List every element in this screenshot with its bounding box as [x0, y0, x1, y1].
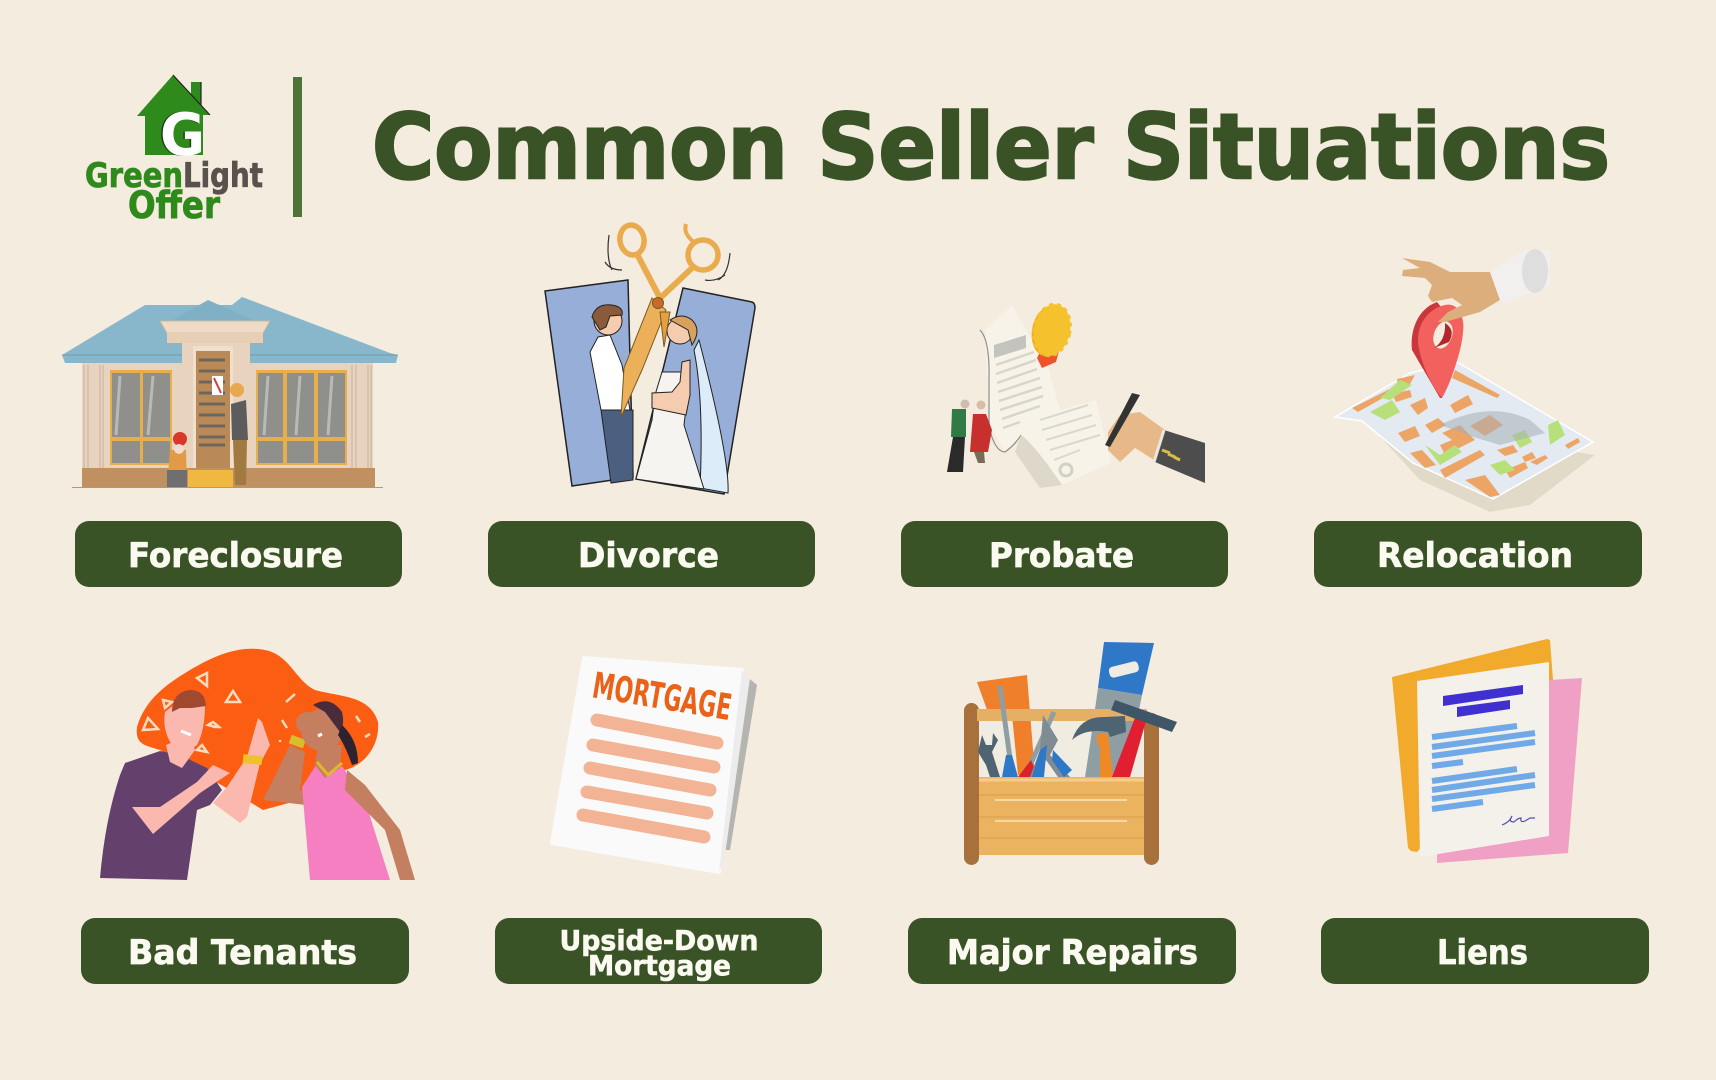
- pill: Major Repairs: [908, 918, 1236, 984]
- logo: GreenLight Offer: [85, 75, 263, 227]
- pill: Divorce: [488, 521, 815, 587]
- illustration: lien documents: [1392, 639, 1582, 863]
- pill: Upside-Down Mortgage: Upside-Down: [560, 924, 758, 957]
- logo: GreenLight Offer: G: [160, 100, 205, 169]
- title: Common Seller Situations: [372, 95, 1610, 200]
- illustration: toolbox: [964, 642, 1177, 865]
- pill: Foreclosure: Foreclosure: [128, 536, 343, 576]
- illustration: foreclosure house: [62, 297, 398, 488]
- pill: Upside-Down Mortgage: [495, 918, 822, 984]
- illustration: probate document: [947, 301, 1205, 488]
- illustration: relocation map and pin: [1335, 249, 1595, 512]
- logo: GreenLight Offer: Light: [183, 156, 263, 196]
- pill: Relocation: Relocation: [1377, 536, 1573, 576]
- pill: Upside-Down Mortgage: Mortgage: [588, 949, 731, 982]
- pill: Foreclosure: [75, 521, 402, 587]
- logo: GreenLight Offer: Offer: [128, 184, 221, 227]
- logo: GreenLight Offer: Green: [85, 156, 183, 196]
- illustration: divorce scissors: [545, 223, 755, 494]
- pill: Divorce: Divorce: [578, 536, 719, 576]
- pill: Bad Tenants: Bad Tenants: [128, 933, 357, 973]
- illustration: mortgage paper: MORTGAGE: [590, 665, 734, 729]
- pill: Relocation: [1314, 521, 1642, 587]
- pill: Probate: Probate: [989, 536, 1134, 576]
- header divider: [293, 77, 302, 217]
- pill: Bad Tenants: [81, 918, 409, 984]
- pill: Major Repairs: Major Repairs: [947, 933, 1198, 973]
- pill: Liens: [1321, 918, 1649, 984]
- pill: Probate: [901, 521, 1228, 587]
- pill: Liens: Liens: [1437, 933, 1528, 973]
- logo: GreenLight Offer: G: [158, 100, 204, 169]
- illustration: bad tenants arguing: [100, 649, 415, 880]
- illustration: mortgage paper: [552, 658, 757, 872]
